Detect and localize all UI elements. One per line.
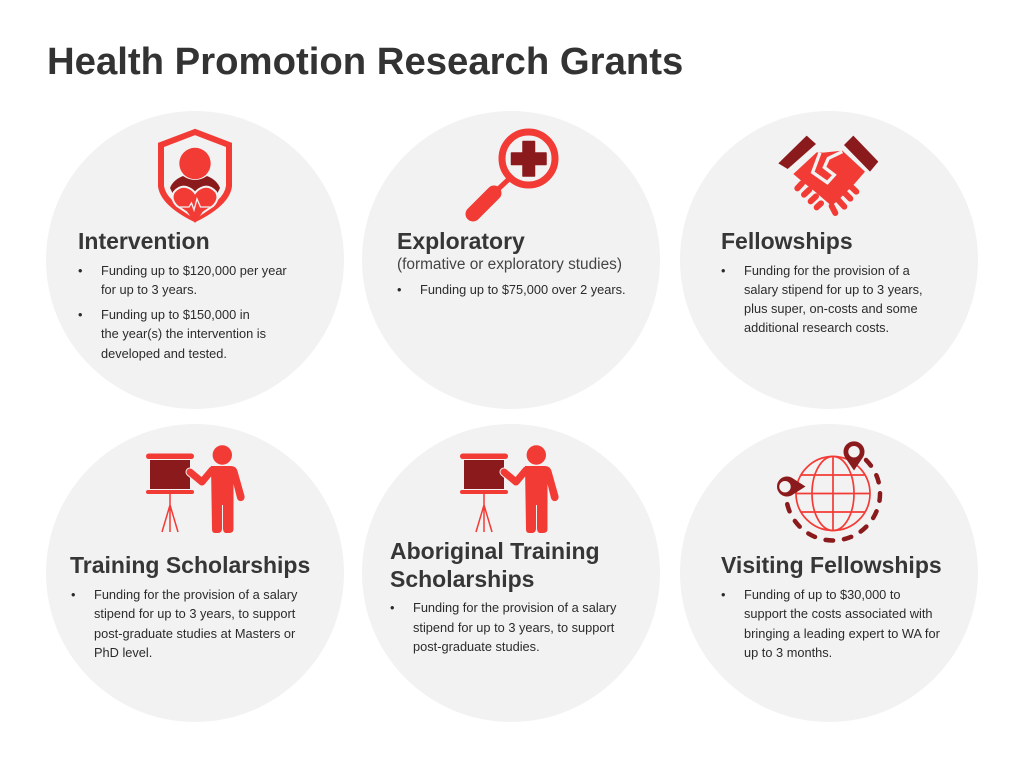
icon: handshake bbox=[778, 136, 878, 213]
text block: Intervention bullets: developed and tested. bbox=[101, 346, 227, 361]
text block: Visiting Fellowships bullet: support the costs associated with bbox=[744, 606, 932, 621]
heading: Training Scholarships: Training Scholarships bbox=[70, 552, 310, 578]
icon: presenter at board bbox=[460, 445, 559, 533]
text block: Intervention bullets bbox=[78, 263, 287, 361]
text block: Fellowships bullet: salary stipend for up to 3 years, bbox=[744, 282, 923, 297]
text block: Intervention bullets: • bbox=[78, 307, 82, 322]
text block: Intervention bullets: for up to 3 years. bbox=[101, 282, 197, 297]
text block: Training Scholarships bullet: post-graduate studies at Masters or bbox=[94, 626, 296, 641]
text block: Fellowships bullet bbox=[721, 263, 923, 335]
subheading: formative or exploratory studies: (formative or exploratory studies) bbox=[397, 256, 622, 273]
heading: Fellowships: Fellowships bbox=[721, 228, 853, 254]
text block: Visiting Fellowships bullet: bringing a leading expert to WA for bbox=[744, 626, 941, 641]
text block: Aboriginal Training Scholarships bullet: stipend for up to 3 years, to support bbox=[413, 620, 615, 635]
circle background: Fellowships bbox=[680, 111, 978, 409]
text block: Visiting Fellowships bullet: up to 3 months. bbox=[744, 645, 832, 660]
heading: Aboriginal Training Scholarships: Aboriginal Training bbox=[390, 538, 600, 564]
circle background: Training Scholarships bbox=[46, 424, 344, 722]
text block: Training Scholarships bullet: Funding for the provision of a salary bbox=[94, 587, 298, 602]
text block: Aboriginal Training Scholarships bullet bbox=[390, 600, 617, 654]
text block: Training Scholarships bullet: • bbox=[71, 587, 75, 602]
circle background: Intervention bbox=[46, 111, 344, 409]
text block: Fellowships bullet: additional research costs. bbox=[744, 320, 889, 335]
text block: Aboriginal Training Scholarships bullet: • bbox=[390, 600, 394, 615]
circle background: Aboriginal Training Scholarships bbox=[362, 424, 660, 722]
heading: Intervention: Intervention bbox=[78, 228, 210, 254]
text block: Training Scholarships bullet: stipend for up to 3 years, to support bbox=[94, 606, 296, 621]
icon: magnifying glass with cross bbox=[473, 132, 555, 214]
icon: shield with person and heart bbox=[161, 132, 229, 223]
text block: Fellowships bullet: plus super, on-costs and some bbox=[744, 301, 918, 316]
text block: Intervention bullets: the year(s) the intervention is bbox=[101, 326, 266, 341]
text block: Intervention bullets: Funding up to $150,000 in bbox=[101, 307, 250, 322]
panel: Intervention bbox=[46, 111, 344, 409]
text block: Visiting Fellowships bullet: • bbox=[721, 587, 725, 602]
circle background: Exploratory bbox=[362, 111, 660, 409]
text block: Training Scholarships bullet: PhD level. bbox=[94, 645, 152, 660]
panel: Training Scholarships bbox=[46, 424, 344, 722]
text block: Visiting Fellowships bullet bbox=[721, 587, 941, 660]
panel: Exploratory bbox=[362, 111, 660, 409]
icon: presenter at board bbox=[146, 445, 245, 533]
heading: Aboriginal Training Scholarships: Scholarships bbox=[390, 566, 534, 592]
text block: Training Scholarships bullet bbox=[71, 587, 298, 660]
text block: Fellowships bullet: • bbox=[721, 263, 725, 278]
text block: Exploratory bullet: • bbox=[397, 282, 401, 297]
panel: Fellowships bbox=[680, 111, 978, 409]
text block: Exploratory bullet: Funding up to $75,000 over 2 years. bbox=[420, 282, 626, 297]
icon: globe with location pins bbox=[777, 441, 880, 540]
circle background: Visiting Fellowships bbox=[680, 424, 978, 722]
heading: Visiting Fellowships: Visiting Fellowships bbox=[721, 552, 942, 578]
heading: Exploratory: Exploratory bbox=[397, 228, 525, 254]
panel: Aboriginal Training Scholarships bbox=[362, 424, 660, 722]
panel: Visiting Fellowships bbox=[680, 424, 978, 722]
text block: Fellowships bullet: Funding for the provision of a bbox=[744, 263, 911, 278]
text block: Visiting Fellowships bullet: Funding of up to $30,000 to bbox=[744, 587, 901, 602]
title: Health Promotion Research Grants bbox=[47, 40, 683, 83]
text block: Intervention bullets: • bbox=[78, 263, 82, 278]
text block: Intervention bullets: Funding up to $120,000 per year bbox=[101, 263, 287, 278]
text block: Aboriginal Training Scholarships bullet: post-graduate studies. bbox=[413, 639, 540, 654]
text block: Aboriginal Training Scholarships bullet: Funding for the provision of a salary bbox=[413, 600, 617, 615]
